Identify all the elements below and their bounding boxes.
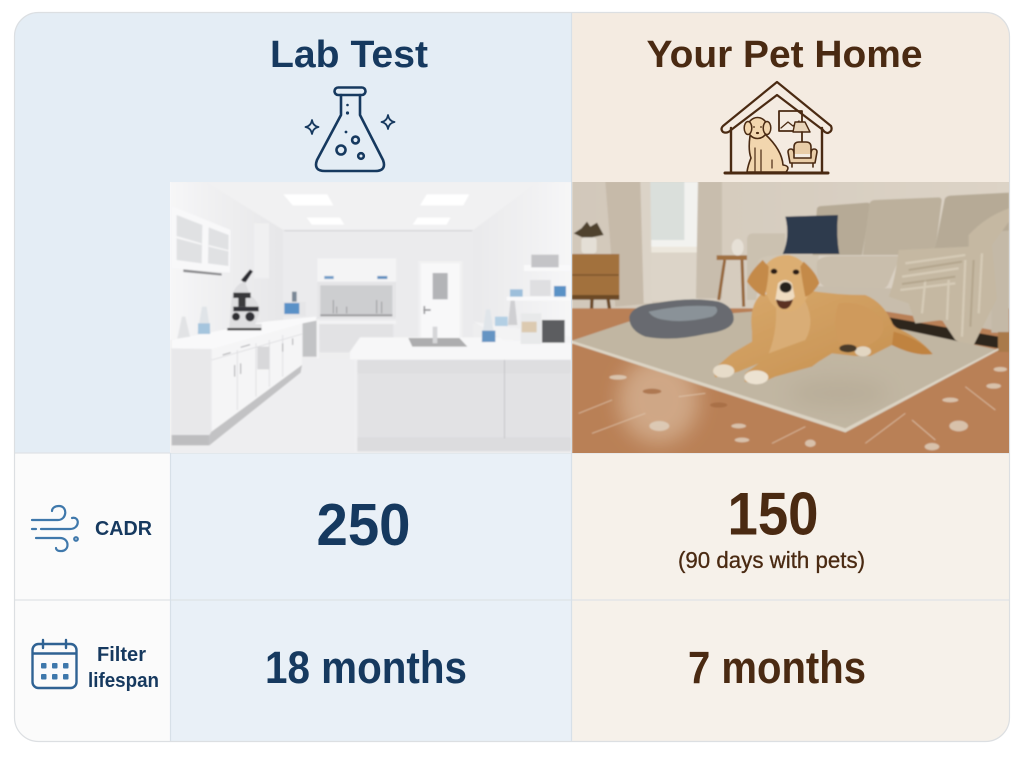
left counter (172, 317, 316, 445)
fume hood (303, 258, 396, 361)
value: lab CADR: 250 (316, 492, 410, 558)
window and curtains (605, 182, 722, 307)
row: CADR label (32, 506, 153, 551)
icon: flask (306, 88, 394, 171)
wood floor (572, 308, 1012, 455)
navy pillow (783, 215, 839, 254)
heading: Your Pet Home: Your Pet Home (646, 34, 922, 76)
value: lab filter lifespan: 18 months (265, 642, 467, 693)
label: CADR: CADR (95, 518, 153, 540)
note: 90 days with pets: (90 days with pets) (678, 547, 865, 573)
island counter (350, 327, 572, 453)
throw blanket (889, 208, 1009, 348)
floor (170, 358, 354, 455)
shed fur on floor (579, 367, 1007, 450)
heading: Lab Test: Lab Test (270, 34, 428, 76)
value: pet home CADR: 150 (728, 480, 818, 548)
value: pet home filter lifespan: 7 months (688, 642, 866, 693)
golden retriever (713, 255, 933, 384)
photo: living room with golden retriever (572, 180, 1012, 455)
door (420, 263, 460, 337)
sofa (747, 193, 1009, 352)
dog bed (629, 299, 734, 339)
icon: wind (32, 506, 78, 551)
dresser, plant and side table (572, 222, 747, 315)
row: filter lifespan label (32, 640, 159, 692)
label: Filter lifespan: lifespan (88, 670, 159, 692)
icon: calendar (32, 640, 76, 688)
icon: house with dog (722, 82, 832, 173)
label: Filter lifespan: Filter (97, 644, 146, 666)
value: pet home CADR (678, 480, 865, 573)
glassware on left counter (177, 292, 306, 339)
glassware on right shelves (481, 254, 567, 344)
photo: white laboratory (170, 180, 572, 455)
microscope (227, 269, 262, 330)
rug (572, 312, 999, 432)
